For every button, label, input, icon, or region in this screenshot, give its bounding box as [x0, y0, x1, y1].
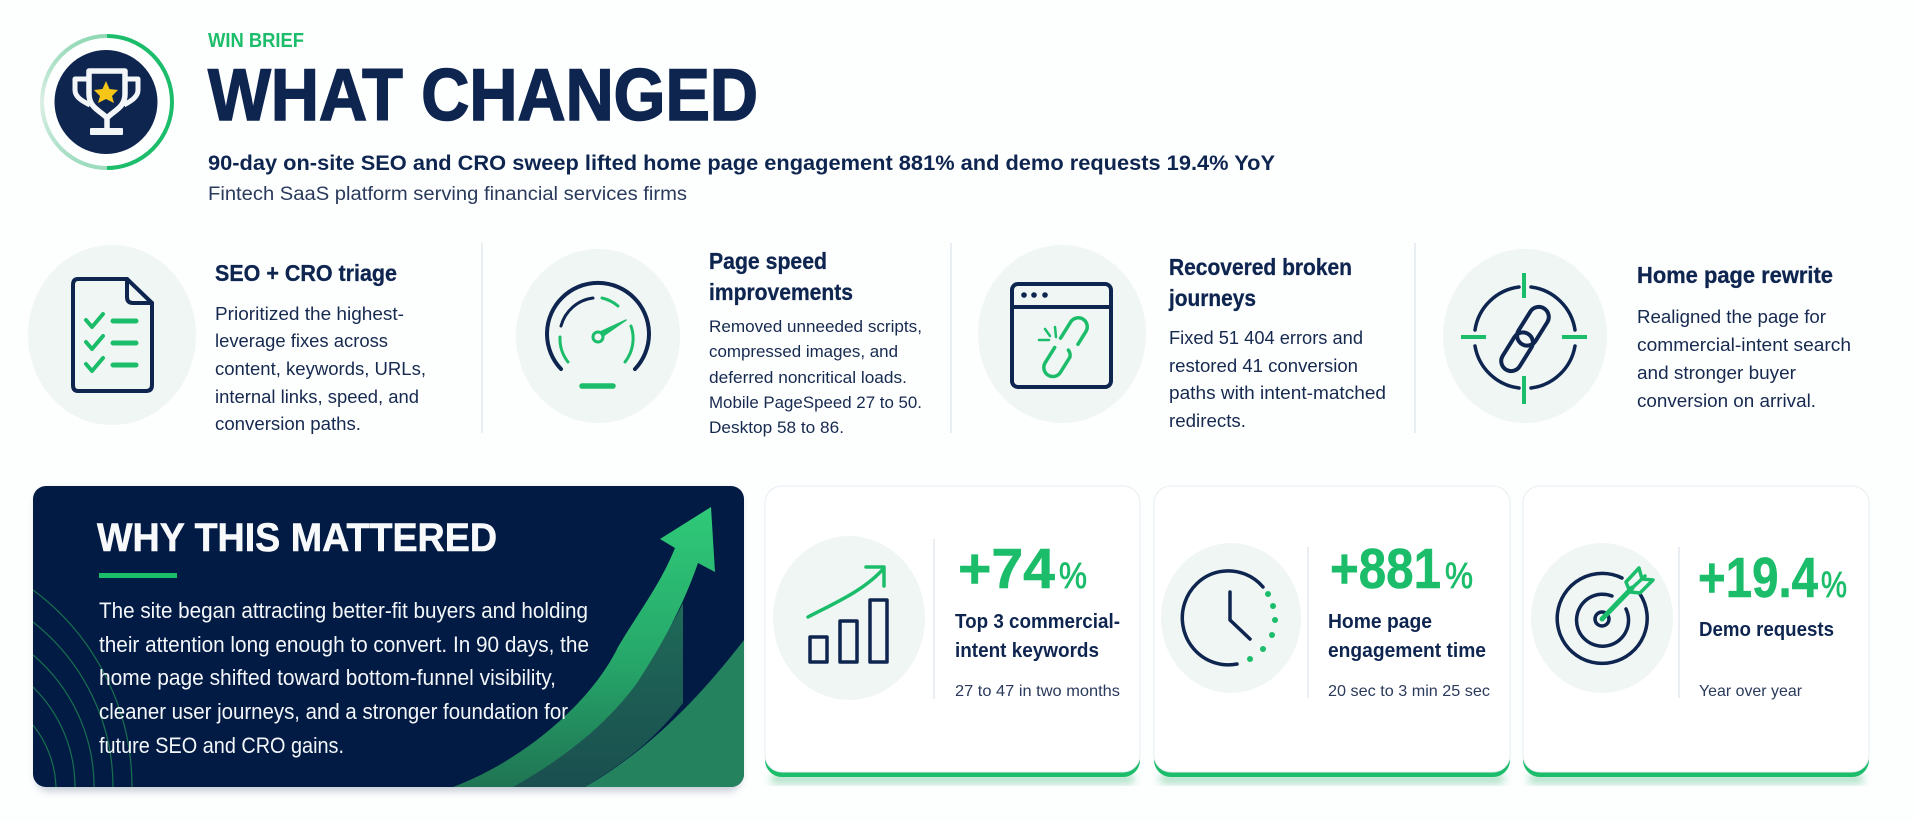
eyebrow: win brief: WIN BRIEF [208, 30, 304, 52]
body text: Removed unneeded scripts, [709, 317, 922, 336]
icon: trophy badge [42, 36, 172, 168]
heading: Recovered broken [1169, 254, 1352, 280]
heading: improvements [709, 279, 853, 305]
heading: SEO + CRO triage [215, 260, 397, 286]
card: top 3 keywords [765, 486, 1140, 784]
stat label: intent keywords [955, 639, 1099, 662]
stat: +881%: % [1445, 555, 1473, 596]
context line: Fintech SaaS platform serving financial services firms [208, 184, 687, 205]
body text: Realigned the page for [1637, 306, 1826, 327]
body text [709, 317, 922, 437]
subtitle: 90-day on-site SEO and CRO sweep lifted home page engagement 881% and demo requests 19.4% YoY [208, 152, 1275, 175]
body text: home page shifted toward bottom-funnel visibility, [99, 665, 556, 690]
body text [99, 598, 589, 758]
body text: content, keywords, URLs, [215, 358, 426, 379]
body text: compressed images, and [709, 342, 898, 361]
icon: checklist document [73, 279, 152, 391]
stat label: Demo requests [1699, 618, 1834, 641]
body text: and stronger buyer [1637, 362, 1796, 383]
body text [215, 303, 426, 434]
body text: paths with intent-matched [1169, 382, 1386, 403]
body text: Fixed 51 404 errors and [1169, 327, 1363, 348]
body text [1169, 327, 1386, 431]
stat note: 27 to 47 in two months [955, 683, 1120, 700]
panel: recovered broken journeys [978, 245, 1386, 431]
panel: why this mattered [33, 486, 744, 791]
stat label: Top 3 commercial- [955, 610, 1120, 633]
heading: journeys [1168, 285, 1256, 311]
body text: commercial-intent search [1637, 334, 1851, 355]
card: home page engagement [1154, 486, 1510, 784]
body text: leverage fixes across [215, 330, 388, 351]
stat: +74%: +74 [958, 537, 1055, 601]
stat: +881%: +881 [1330, 537, 1441, 601]
panel: page speed improvements [516, 248, 922, 437]
body text: conversion on arrival. [1637, 390, 1816, 411]
card: demo requests [1523, 486, 1869, 784]
stat: +19.4%: % [1821, 564, 1847, 605]
body text: redirects. [1169, 410, 1246, 431]
body text: Mobile PageSpeed 27 to 50. [709, 393, 922, 412]
icon: clock [1182, 571, 1278, 665]
heading [709, 248, 853, 305]
body text: Prioritized the highest- [215, 303, 404, 324]
body text: restored 41 conversion [1169, 355, 1358, 376]
stat note: Year over year [1699, 683, 1803, 700]
icon: speed gauge [547, 283, 649, 386]
heading: Page speed [709, 248, 827, 274]
icon: browser with broken link [1012, 284, 1111, 387]
body text: deferred noncritical loads. [709, 368, 907, 387]
body text: their attention long enough to convert. In 90 days, the [99, 632, 589, 657]
body text: The site began attracting better-fit buyers and holding [99, 598, 588, 623]
icon: link in crosshair [1461, 273, 1587, 404]
heading: WHY THIS MATTERED [97, 516, 497, 560]
stat label: engagement time [1328, 639, 1486, 662]
body text: cleaner user journeys, and a stronger foundation for [99, 699, 568, 724]
stat note: 20 sec to 3 min 25 sec [1328, 683, 1490, 700]
stat label [955, 610, 1120, 662]
icon: rising bar chart [808, 567, 887, 662]
body text: conversion paths. [215, 413, 361, 434]
heading: Home page rewrite [1637, 262, 1833, 288]
panel: home page rewrite [1443, 249, 1851, 423]
stat label [1328, 610, 1486, 662]
title: WHAT CHANGED [208, 55, 758, 136]
decorative growth arrow [33, 507, 744, 787]
body text: future SEO and CRO gains. [99, 733, 344, 758]
icon: target with arrow [1557, 568, 1653, 663]
body text [1637, 306, 1851, 411]
body text: internal links, speed, and [215, 386, 419, 407]
heading [1168, 254, 1352, 311]
stat label: Home page [1328, 610, 1432, 633]
panel: SEO + CRO triage [28, 245, 426, 434]
stat: +19.4%: +19.4 [1698, 546, 1818, 610]
stat: +74%: % [1059, 555, 1087, 596]
body text: Desktop 58 to 86. [709, 418, 844, 437]
